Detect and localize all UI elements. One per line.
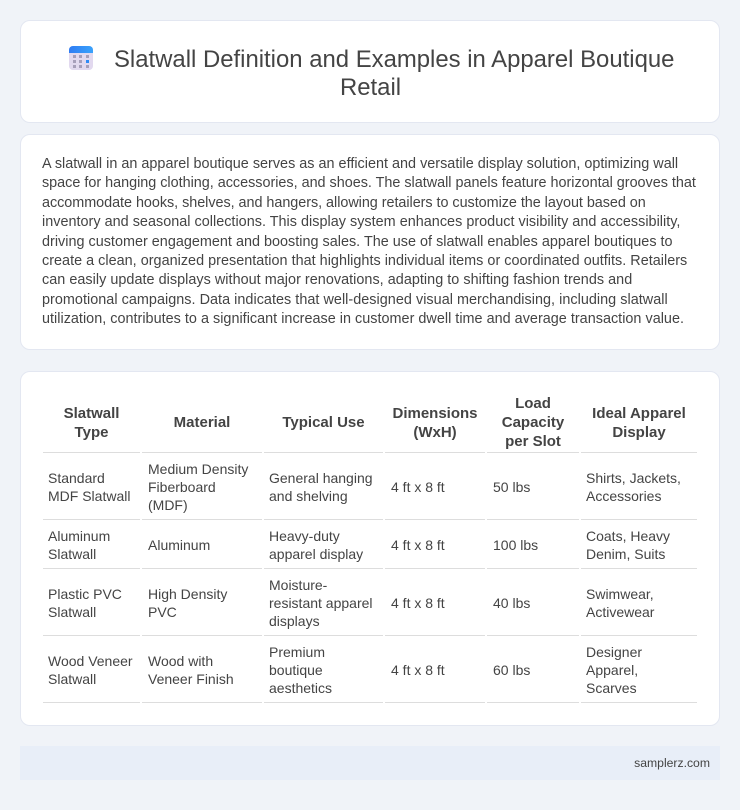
table: slatwall types: and shelving	[269, 488, 348, 504]
text block: description: can easily update displays without major renovations, adapting to shifting fashion trends and	[42, 272, 632, 288]
text block: description: space for hanging clothing, accessories, and shoes. The slatwall panels feature horizontal grooves that	[42, 175, 696, 191]
table: slatwall types: Scarves	[586, 680, 637, 696]
table: slatwall types: displays	[269, 613, 320, 629]
table: slatwall types: Aluminum	[48, 528, 110, 544]
table: slatwall types: Material	[174, 414, 230, 431]
table: slatwall types: High Density	[148, 586, 227, 602]
table: slatwall types: Plastic PVC	[48, 586, 122, 602]
table: slatwall types	[43, 395, 697, 703]
table: slatwall types: 4 ft x 8 ft	[391, 662, 445, 678]
table: slatwall types: Veneer Finish	[148, 671, 234, 687]
table: slatwall types: 60 lbs	[493, 662, 530, 678]
table: slatwall types: Slatwall	[48, 546, 96, 562]
table: slatwall types: Ideal Apparel	[592, 404, 686, 422]
table: slatwall types: Designer	[586, 644, 642, 660]
table: slatwall types: Coats, Heavy	[586, 528, 670, 544]
title	[114, 46, 674, 101]
table: slatwall types: Typical Use	[282, 414, 365, 431]
table: slatwall types: Wood Veneer	[48, 653, 133, 669]
footer	[20, 746, 720, 780]
table: slatwall types: Slatwall	[48, 671, 96, 687]
table: slatwall types: 40 lbs	[493, 595, 530, 611]
panel: header	[20, 20, 720, 123]
table: slatwall types: Type	[75, 424, 108, 440]
table: slatwall types: Shirts, Jackets,	[586, 470, 681, 486]
text block: description: create a clean, organized presentation that highlights individual items or coordinated outfits. Retailers	[42, 253, 687, 269]
table: slatwall types: Load	[515, 395, 551, 412]
table: slatwall types: PVC	[148, 604, 177, 620]
text block: description: driving customer engagement and boosting sales. The use of slatwall enables apparel boutiques to	[42, 234, 673, 250]
table: slatwall types: apparel display	[269, 546, 363, 562]
table: slatwall types: Aluminum	[148, 537, 210, 553]
title: Slatwall Definition and Examples in Apparel Boutique	[114, 46, 674, 73]
panel: description	[20, 134, 720, 350]
table: slatwall types: General hanging	[269, 470, 373, 486]
text block: description: promotional campaigns. Data indicates that well-designed visual merchandising, including slatwall	[42, 292, 668, 308]
table: slatwall types: Display	[612, 424, 666, 440]
table: slatwall types: Premium	[269, 644, 325, 660]
text block: description: A slatwall in an apparel boutique serves as an efficient and versatile display solution, optimizing wall	[42, 156, 678, 172]
table: slatwall types: per Slot	[505, 433, 561, 450]
text block: description: inventory and seasonal collections. This display system enhances product visibility and accessibility,	[42, 214, 680, 230]
table: slatwall types: (MDF)	[148, 497, 188, 513]
table: slatwall types: Heavy-duty	[269, 528, 340, 544]
table: slatwall types: resistant apparel	[269, 595, 373, 611]
table: slatwall types: Slatwall	[48, 604, 96, 620]
text block: description	[42, 156, 696, 327]
table: slatwall types: 4 ft x 8 ft	[391, 537, 445, 553]
table: slatwall types: Swimwear,	[586, 586, 654, 602]
table: slatwall types: (WxH)	[413, 424, 457, 440]
table: slatwall types: Activewear	[586, 604, 654, 620]
table: slatwall types: Fiberboard	[148, 479, 216, 495]
table: slatwall types: Apparel,	[586, 662, 638, 678]
table: slatwall types: Slatwall	[64, 404, 119, 422]
table: slatwall types: 100 lbs	[493, 537, 538, 553]
panel: comparison table	[20, 371, 720, 726]
table: slatwall types: 4 ft x 8 ft	[391, 595, 445, 611]
table: slatwall types: Medium Density	[148, 461, 248, 477]
table: slatwall types: MDF Slatwall	[48, 488, 130, 504]
text block: description: accommodate hooks, shelves, and hangers, allowing retailers to customize the layout based on	[42, 195, 646, 211]
table: slatwall types: aesthetics	[269, 680, 332, 696]
title: Retail	[340, 74, 401, 101]
table: slatwall types: boutique	[269, 662, 323, 678]
table: slatwall types: 50 lbs	[493, 479, 530, 495]
table: slatwall types: Capacity	[502, 414, 564, 431]
table: slatwall types: Dimensions	[392, 404, 478, 422]
footer credit: samplerz.com	[634, 756, 710, 770]
table: slatwall types: Standard	[48, 470, 105, 486]
table: slatwall types: Moisture-	[269, 577, 327, 593]
icon: calendar	[69, 46, 93, 70]
table: slatwall types: 4 ft x 8 ft	[391, 479, 445, 495]
table: slatwall types: Wood with	[148, 653, 213, 669]
table: slatwall types: Accessories	[586, 488, 661, 504]
table: slatwall types: Denim, Suits	[586, 546, 665, 562]
text block: description: utilization, contributes to a significant increase in customer dwell time and average transaction value.	[42, 311, 684, 327]
